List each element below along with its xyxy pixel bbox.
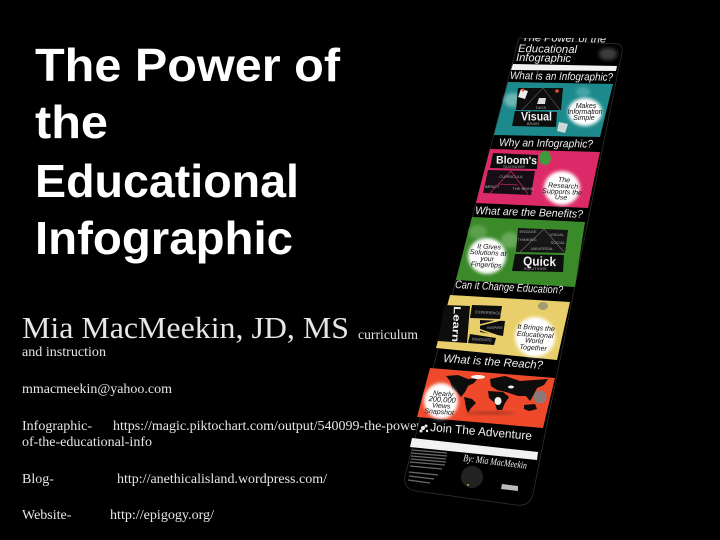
strip heading: Infographic bbox=[516, 52, 572, 65]
title: Infographic bbox=[35, 212, 293, 264]
callout: it brings the educational world together: Educational bbox=[517, 331, 554, 340]
strip heading: The Power of the bbox=[522, 32, 606, 45]
triangle diagram: SOCIAL bbox=[551, 240, 566, 245]
callout: it brings the educational world together: World bbox=[525, 337, 545, 346]
bloom's label: TAXONOMY bbox=[503, 164, 526, 169]
callout: it brings the educational world together: Together bbox=[519, 344, 548, 353]
callout: the research supports the use: Research bbox=[548, 182, 578, 191]
license badge bbox=[501, 484, 518, 491]
quick label bbox=[512, 254, 564, 272]
triangle diagram: CURRICULA bbox=[499, 174, 523, 179]
tilted infographic strip bbox=[405, 32, 622, 505]
title: Educational bbox=[35, 155, 299, 207]
panel: quick bbox=[456, 217, 585, 287]
section heading: can it change education: Can it Change Education? bbox=[455, 279, 564, 297]
triangle diagram: UNIVERSAL bbox=[531, 246, 554, 251]
author name: Mia MacMeekin, JD, MS bbox=[22, 310, 349, 345]
callout: makes information simple: Information bbox=[567, 109, 603, 116]
strip body bbox=[405, 38, 622, 505]
visual label: Visual bbox=[521, 112, 552, 124]
website link: Website- bbox=[22, 508, 72, 523]
callout: the research supports the use: Use bbox=[555, 194, 568, 202]
title: The Power of bbox=[35, 39, 341, 91]
strip heading bbox=[511, 38, 620, 71]
title: the bbox=[35, 96, 108, 148]
callout: 200,000 views snapshot: Nearly bbox=[433, 390, 454, 399]
infographic link: of-the-educational-info bbox=[22, 435, 152, 450]
callout: makes information simple: Simple bbox=[573, 115, 595, 122]
blog link: http://anethicalisland.wordpress.com/ bbox=[117, 472, 327, 487]
quick label: Quick bbox=[523, 254, 557, 269]
callout: it brings the educational world together: It Brings the bbox=[517, 324, 555, 333]
bloom's label bbox=[490, 153, 538, 169]
infographic link: https://magic.piktochart.com/output/540099-the-power- bbox=[113, 419, 426, 434]
callout: it gives solutions: It Gives bbox=[477, 243, 502, 252]
email: mmacmeekin@yahoo.com bbox=[22, 382, 172, 397]
website link bbox=[22, 508, 214, 523]
triangle diagram bbox=[483, 170, 535, 195]
strip heading: Educational bbox=[518, 43, 578, 56]
footer banner bbox=[410, 438, 538, 460]
footer bbox=[408, 450, 527, 491]
panel: bloom's bbox=[476, 149, 600, 208]
callout: it brings the educational world together bbox=[515, 317, 555, 357]
callout: 200,000 views snapshot bbox=[424, 383, 458, 419]
experience inspire innovate diagram bbox=[468, 305, 505, 345]
visual label bbox=[512, 111, 557, 127]
callout: makes information simple: Makes bbox=[576, 103, 597, 110]
triangle diagram: DATA bbox=[536, 105, 546, 110]
author and links text block bbox=[22, 310, 426, 523]
callout: the research supports the use: The bbox=[558, 177, 570, 184]
experience inspire innovate diagram: EXPERIENCE bbox=[475, 309, 501, 316]
blog link: Blog- bbox=[22, 472, 54, 487]
infographic link: Infographic- bbox=[22, 419, 92, 434]
callout: the research supports the use: Supports the bbox=[542, 188, 582, 197]
bloom's label: Bloom's bbox=[496, 155, 537, 167]
quick label: SOLUTIONS bbox=[523, 266, 547, 271]
triangle diagram: VISUAL bbox=[550, 232, 565, 237]
learn label: Learn bbox=[449, 306, 462, 342]
triangle diagram: IMPACT bbox=[485, 184, 500, 189]
section heading: join the adventure: Join The Adventure bbox=[430, 420, 533, 443]
website link: http://epigogy.org/ bbox=[110, 508, 214, 523]
callout: the research supports the use bbox=[542, 171, 582, 205]
fine print bbox=[408, 450, 447, 483]
section heading: what is the reach: What is the Reach? bbox=[443, 353, 544, 372]
title bbox=[35, 39, 341, 264]
infographic link bbox=[22, 419, 426, 450]
callout: it gives solutions: Solutions at bbox=[470, 249, 508, 258]
panel: reach bbox=[417, 368, 555, 428]
experience inspire innovate diagram: INNOVATE bbox=[472, 336, 492, 343]
visual label: BRAIN bbox=[527, 121, 539, 126]
experience inspire innovate diagram: INSPIRE bbox=[487, 325, 503, 330]
section heading: what are the benefits: What are the Benefits? bbox=[475, 205, 584, 221]
section heading: what is an infographic: What is an Infographic? bbox=[510, 70, 614, 84]
triangle diagram: THINKING bbox=[517, 237, 537, 242]
world map bbox=[446, 375, 548, 413]
triangle diagram: ENGAGE bbox=[519, 229, 537, 234]
panel: visual bbox=[494, 82, 613, 137]
callout: 200,000 views snapshot: Views bbox=[432, 402, 451, 411]
triangle diagram: THE BRAIN bbox=[512, 186, 534, 191]
blog link bbox=[22, 472, 327, 487]
callout: it gives solutions: Fingertips bbox=[471, 261, 502, 270]
callout: it gives solutions: your bbox=[479, 256, 495, 263]
callout: 200,000 views snapshot: Snapshot bbox=[424, 408, 455, 417]
author signature: By: Mia MacMeekin bbox=[463, 453, 527, 472]
author role continued: and instruction bbox=[22, 345, 106, 360]
icon: white splat bbox=[420, 424, 428, 432]
panel: learn bbox=[436, 295, 570, 360]
section heading: why an infographic: Why an Infographic? bbox=[499, 137, 594, 151]
callout: it gives solutions bbox=[468, 238, 508, 274]
reach badge bbox=[534, 390, 546, 404]
callout: 200,000 views snapshot: 200,000 bbox=[427, 394, 457, 405]
author role: curriculum bbox=[358, 328, 418, 343]
callout: makes information simple bbox=[567, 98, 603, 126]
triangle diagram bbox=[516, 228, 568, 253]
